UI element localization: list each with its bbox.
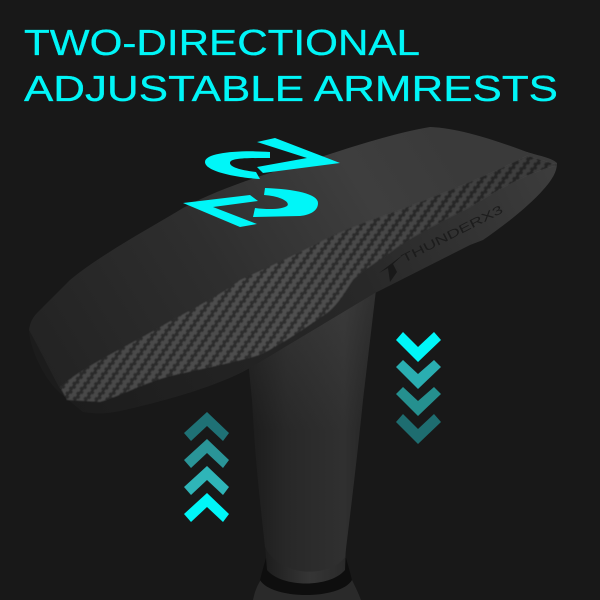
collar xyxy=(265,545,346,584)
icon: downward chevrons xyxy=(396,332,441,444)
outer cone xyxy=(253,576,361,600)
title xyxy=(24,22,558,109)
pad underside with logo xyxy=(29,152,557,413)
carbon fibre band xyxy=(60,156,557,402)
lower chevron xyxy=(183,195,258,227)
armrest post and base xyxy=(248,290,376,600)
icon: upward chevrons xyxy=(184,412,229,522)
title: TWO-DIRECTIONAL xyxy=(24,22,420,63)
lower arc xyxy=(253,188,318,217)
pad top surface xyxy=(29,127,557,389)
icon: horizontal adjustment arrows xyxy=(183,138,340,227)
armrest pad xyxy=(29,127,557,413)
upper chevron xyxy=(257,138,340,173)
title: ADJUSTABLE ARMRESTS xyxy=(24,68,558,109)
post tube xyxy=(248,290,376,572)
upper arc xyxy=(205,151,270,179)
logo mark xyxy=(379,254,404,282)
logo text: THUNDERX3 xyxy=(399,202,506,266)
black ring xyxy=(260,558,352,595)
